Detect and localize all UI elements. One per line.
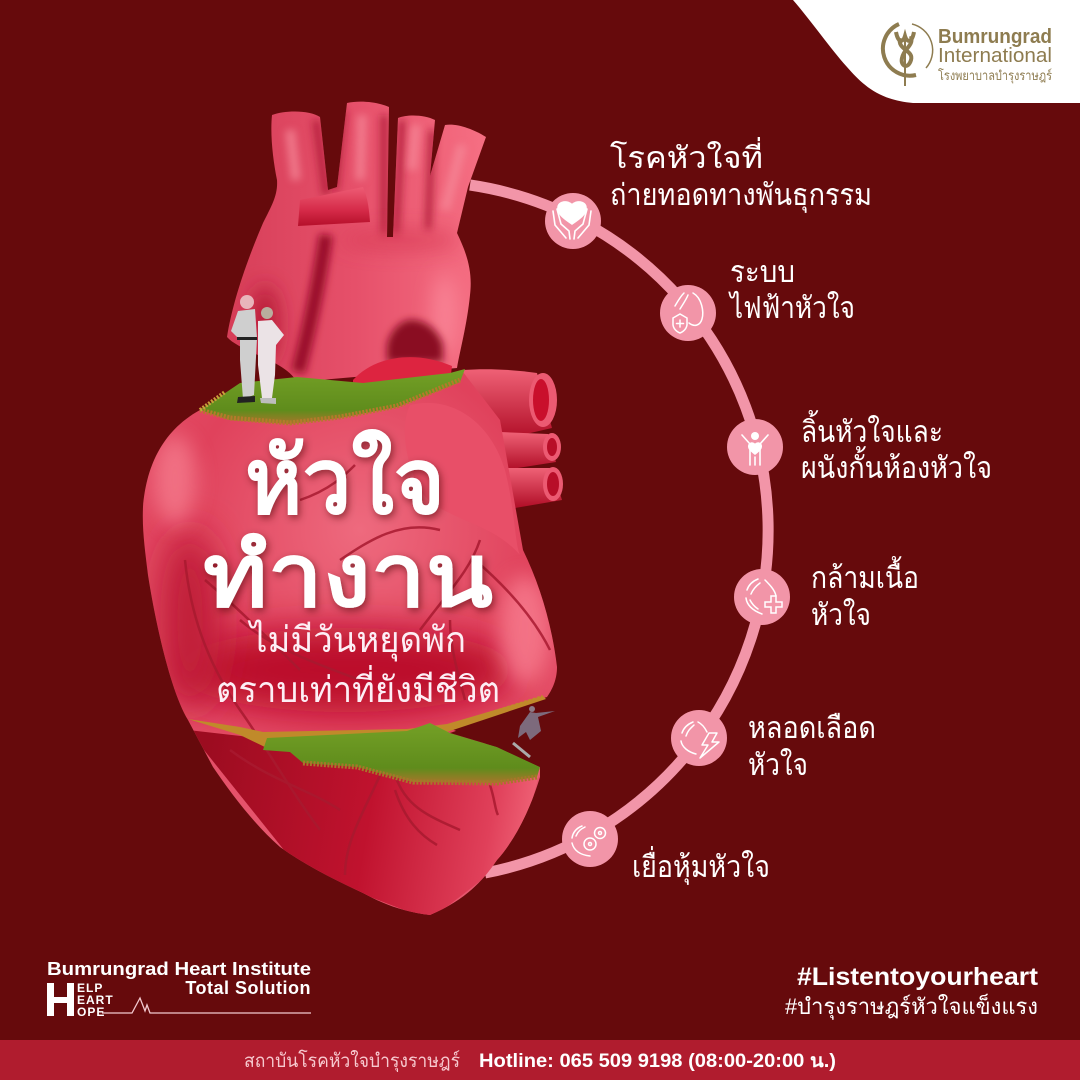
icon: heart with gears: [572, 826, 606, 856]
institute logo: [47, 959, 311, 1019]
upper grass platform: [200, 369, 465, 424]
institute logo: Bumrungrad Heart Institute: [47, 959, 311, 979]
label 3: ผนังกั้นห้องหัวใจ: [801, 446, 992, 485]
horizontal branch tube: [298, 187, 370, 226]
logo emblem: [883, 24, 933, 86]
logo wordmark: โรงพยาบาลบำรุงราษฎร์: [938, 68, 1052, 84]
label 2: [728, 256, 855, 325]
pulmonary vessels: [440, 369, 563, 508]
sub-headline: ตราบเท่าที่ยังมีชีวิต: [216, 665, 500, 710]
header logo panel: [793, 0, 1080, 103]
figure: skateboarder: [513, 706, 555, 757]
node 2: electrical system: [660, 285, 716, 341]
icon: person with heart: [742, 432, 768, 465]
institute logo: ELP: [77, 981, 103, 995]
label 6: เยื่อหุ้มหัวใจ: [632, 846, 770, 886]
icon: heart with lightning: [681, 722, 719, 758]
icon: heart with shield: [673, 293, 703, 333]
label 3: [801, 410, 992, 485]
icon: heart with plus: [746, 579, 782, 614]
label 1: [610, 137, 872, 214]
timeline arc: [470, 185, 768, 873]
label 2: ไฟฟ้าหัวใจ: [728, 290, 855, 325]
node 5: coronary arteries: [671, 710, 727, 766]
icon: hands holding heart: [553, 202, 591, 239]
node 6: pericardium: [562, 811, 618, 867]
hashtags: #Listentoyourheart: [797, 963, 1039, 991]
institute logo: Total Solution: [185, 978, 311, 998]
lower grass platform: [188, 696, 546, 783]
logo wordmark: International: [938, 45, 1052, 67]
heart body: [143, 372, 557, 915]
footer band: Hotline: 065 509 9198 (08:00-20:00 น.): [479, 1051, 836, 1072]
label 5: หัวใจ: [748, 748, 808, 782]
node 4: heart muscle: [734, 569, 790, 625]
sub-headline: ไม่มีวันหยุดพัก: [247, 619, 466, 662]
headline: [203, 429, 493, 625]
label 5: หลอดเลือด: [748, 712, 876, 745]
headline: ทำงาน: [203, 526, 493, 625]
footer band: สถาบันโรคหัวใจบำรุงราษฎร์: [244, 1049, 460, 1073]
logo wordmark: Bumrungrad: [938, 26, 1052, 48]
footer band: [0, 1040, 1080, 1080]
label 4: [811, 556, 919, 632]
sub-headline: [216, 619, 500, 710]
institute logo: EART: [77, 993, 114, 1007]
figures: older couple: [231, 295, 284, 404]
label 4: กล้ามเนื้อ: [811, 556, 919, 595]
aorta and vessels: [227, 102, 486, 384]
headline: หัวใจ: [245, 429, 445, 533]
institute logo: OPE: [77, 1005, 105, 1019]
label 3: ลิ้นหัวใจและ: [801, 410, 943, 449]
logo wordmark: [938, 26, 1052, 84]
label 1: ถ่ายทอดทางพันธุกรรม: [610, 179, 872, 214]
shading and veins: [153, 403, 551, 920]
hashtags: [785, 963, 1039, 1020]
label 4: หัวใจ: [811, 598, 871, 632]
hashtags: #บำรุงราษฎร์หัวใจแข็งแรง: [785, 992, 1038, 1020]
node 3: valves and septum: [727, 419, 783, 475]
label 5: [748, 712, 876, 782]
node 1: hereditary heart disease: [545, 193, 601, 249]
label 1: โรคหัวใจที่: [610, 137, 763, 175]
heart illustration: [143, 102, 563, 920]
label 2: ระบบ: [730, 256, 795, 289]
